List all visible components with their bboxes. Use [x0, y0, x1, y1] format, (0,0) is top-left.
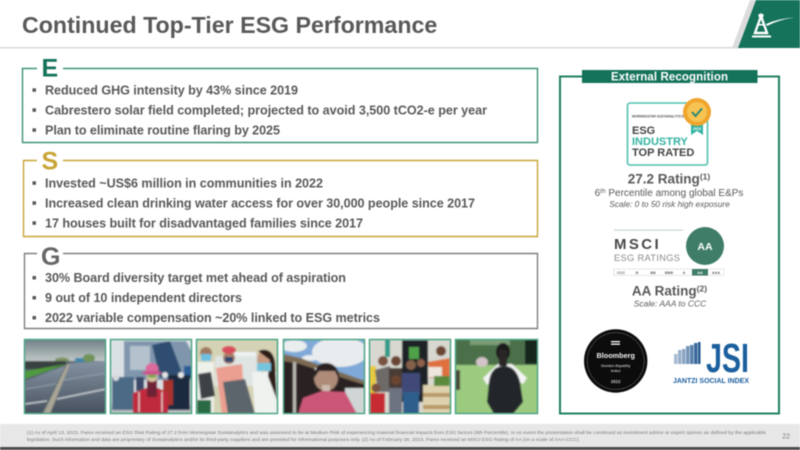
bullets: G: 30% Board diversity target met ahead of aspiration — [45, 271, 346, 285]
badge: MSCI ESG ratings: AA — [697, 241, 713, 253]
page number: 22 — [782, 434, 790, 440]
badge: MSCI ESG ratings: AA — [697, 271, 703, 275]
photo: worker at rig — [110, 339, 192, 414]
header rule — [0, 47, 740, 48]
rating: AA: Scale: AAA to CCC — [634, 298, 707, 308]
bullets: G: 9 out of 10 independent directors — [45, 291, 242, 305]
footnote: legislation. Such information and data are proprietary of Sustainalytics and/or its third-party suppliers and are provided for informational purposes only. (2) As of February 28, 2023, Parex received an MSCI ESG Rating of AA (on a scale of AAA-CCC). — [27, 437, 580, 443]
panel: E environmental — [22, 54, 538, 142]
bullets: S — [32, 176, 475, 230]
badge: Bloomberg gender-equality index: Gender-Equality — [601, 364, 631, 368]
bullets: S: 17 houses built for disadvantaged families since 2017 — [45, 216, 363, 230]
rating: 27.2: 6 — [595, 188, 600, 199]
footnote: (1) As of April 13, 2023, Parex received an ESG Risk Rating of 27.2 from Morningstar Sustainalytics and was assessed to be at Medium Risk of experiencing material financial impacts from ESG factors (6th Percentile). In no event the presentation shall be construed as investment advice or expert opinion as defined by the applicable — [27, 430, 766, 436]
bullets: E: Cabrestero solar field completed; projected to avoid 3,500 tCO2-e per year — [45, 104, 487, 118]
badge: MSCI ESG ratings: MSCI — [614, 236, 661, 253]
bullets: E — [32, 84, 487, 138]
logo: Jantzi Social Index: JANTZI SOCIAL INDEX — [673, 378, 749, 385]
photo: child with water — [281, 337, 368, 414]
bullets: G: 2022 variable compensation ~20% linked to ESG metrics — [45, 311, 380, 325]
photo: community workers with masks — [196, 339, 278, 414]
rating: 27.2: 27.2 Rating — [628, 172, 700, 186]
rating: AA: AA Rating — [632, 284, 697, 298]
badge: MSCI ESG ratings — [614, 227, 724, 276]
panel: G governance — [24, 243, 538, 328]
rating: 27.2: th — [600, 188, 606, 195]
bullets: E: Reduced GHG intensity by 43% since 2019 — [45, 84, 298, 98]
footnote — [27, 430, 766, 443]
bullets: S: Increased clean drinking water access for over 30,000 people since 2017 — [45, 196, 475, 210]
bullets: G — [32, 271, 380, 325]
panel header — [582, 70, 758, 83]
photo: family at home — [369, 339, 451, 414]
panel: external recognition: External Recognition — [611, 72, 728, 84]
badge: MSCI ESG ratings: BBB — [665, 271, 673, 275]
badge: ESG industry top rated: ESG — [632, 125, 655, 137]
logo — [732, 0, 800, 48]
photo: solar field — [24, 339, 106, 414]
badge: MSCI ESG ratings: AAA — [712, 271, 720, 275]
footer band — [0, 424, 800, 450]
badge: MSCI ESG ratings: B — [636, 271, 639, 275]
badge: ESG industry top rated — [628, 98, 711, 165]
rating: 27.2: (1) — [700, 172, 710, 182]
badge: MSCI ESG ratings: CCC — [617, 271, 625, 275]
rating: AA: (2) — [697, 284, 707, 294]
logo: Jantzi Social Index — [673, 335, 749, 385]
bullets: S: Invested ~US$6 million in communities in 2022 — [45, 176, 323, 190]
badge: MSCI ESG ratings: ESG RATINGS — [614, 253, 680, 263]
logo: Jantzi Social Index: JSI — [706, 335, 749, 381]
photo: student in grass — [455, 339, 538, 414]
badge: MSCI ESG ratings: A — [683, 271, 686, 275]
badge: Bloomberg gender-equality index — [584, 329, 647, 393]
badge: ESG industry top rated: MORNINGSTAR SUSTAINALYTICS — [632, 114, 684, 118]
bullets: E: Plan to eliminate routine flaring by 2025 — [45, 124, 280, 138]
rating: 27.2 — [595, 172, 743, 209]
badge: Bloomberg gender-equality index: Index — [611, 369, 622, 373]
heading: G: G — [41, 243, 60, 271]
panel: S social — [24, 148, 538, 236]
rating: 27.2: Scale: 0 to 50 risk high exposure — [609, 199, 730, 209]
badge: ESG industry top rated: 2023 — [693, 127, 701, 131]
heading: S: S — [42, 148, 58, 176]
badge: Bloomberg gender-equality index: 2022 — [611, 379, 621, 384]
rating: AA — [632, 284, 707, 308]
rating: 27.2: Percentile among global E&Ps — [606, 188, 743, 199]
badge: ESG industry top rated: INDUSTRY — [632, 136, 688, 148]
badge: MSCI ESG ratings: BB — [650, 271, 656, 275]
panel: external recognition — [560, 70, 779, 414]
heading: E: E — [42, 54, 58, 82]
badge: Bloomberg gender-equality index: Bloomberg — [596, 351, 635, 360]
title: Continued Top-Tier ESG Performance — [22, 12, 437, 38]
badge: ESG industry top rated: TOP RATED — [632, 147, 694, 159]
